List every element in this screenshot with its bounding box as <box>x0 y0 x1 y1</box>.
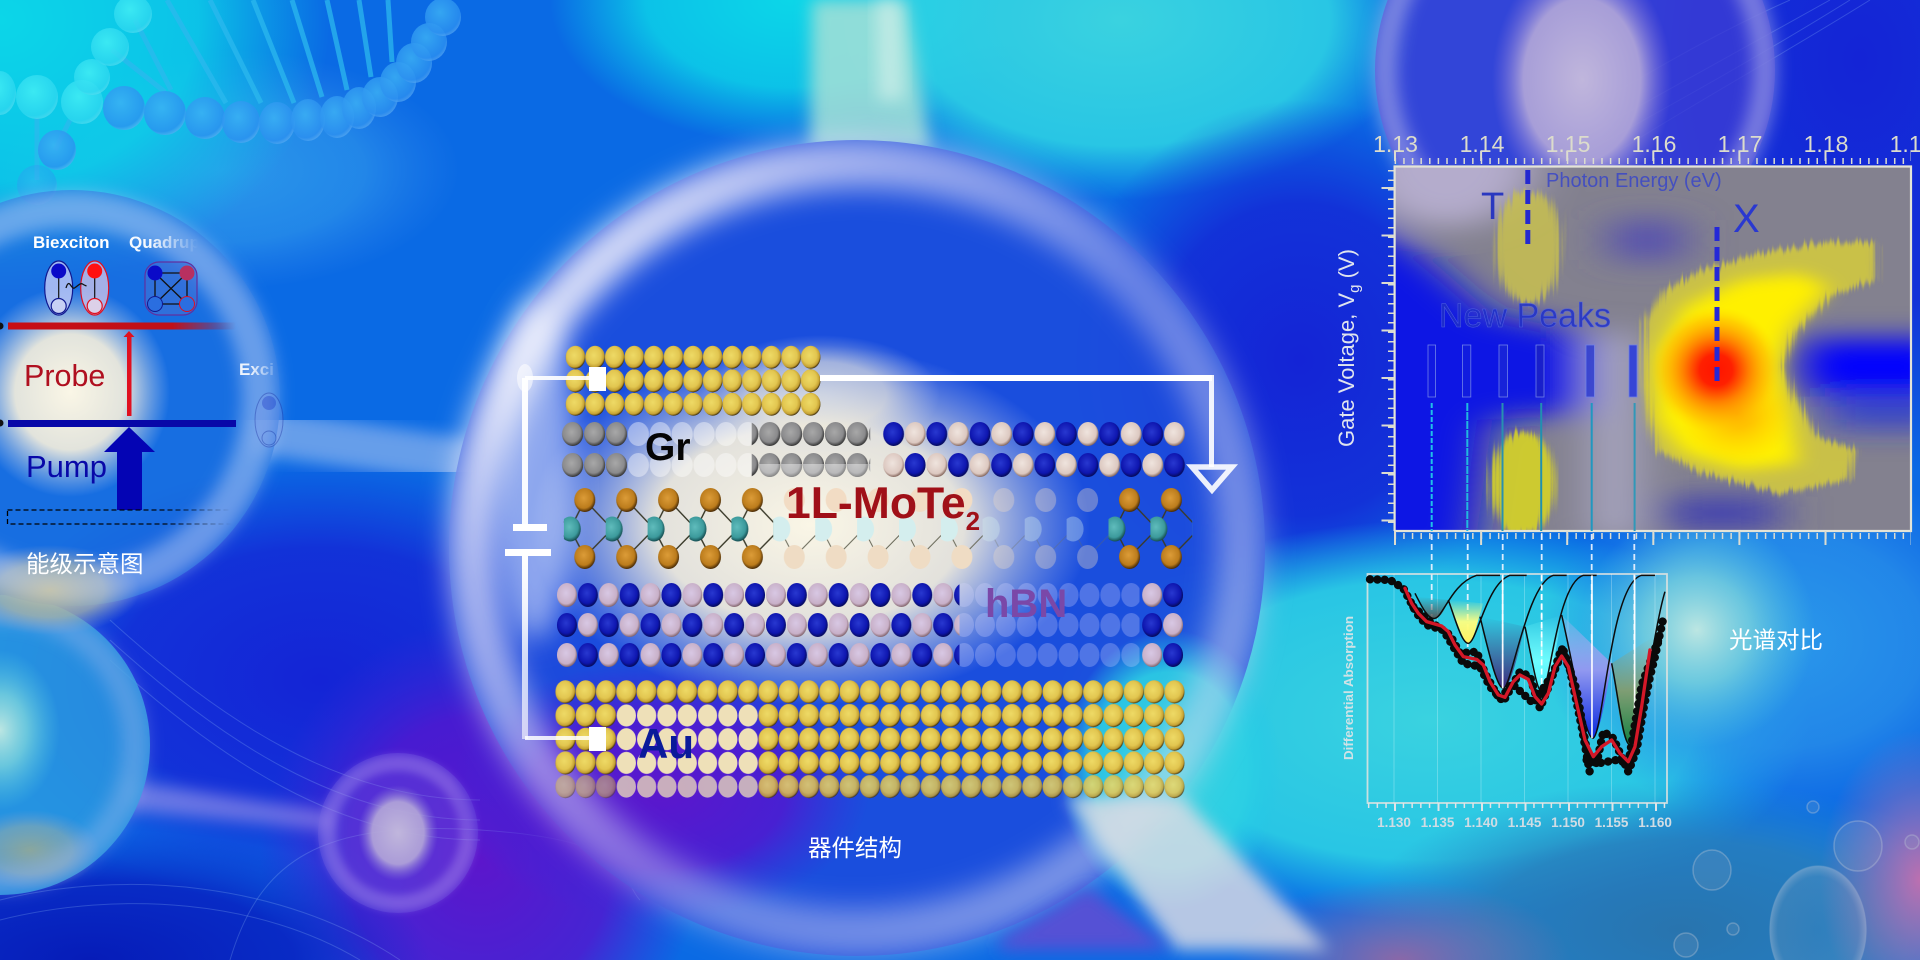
heat map <box>1338 136 1920 545</box>
label: hBN: hBN <box>985 582 1067 626</box>
layer: hBN bottom <box>556 582 1184 668</box>
rod: bottom right <box>1000 797 1329 950</box>
level end dots <box>0 322 4 426</box>
chart axis numbers: 1.145 <box>1508 815 1542 830</box>
absorption spectrum chart <box>1342 574 1672 830</box>
chart axis numbers: 1.150 <box>1551 815 1585 830</box>
sphere: right <box>1579 512 1815 748</box>
axis numbers: 1.15 <box>1546 131 1590 157</box>
arrow: probe <box>124 331 134 416</box>
layer: top gold electrode <box>566 346 820 416</box>
label: Probe: Probe <box>24 359 105 393</box>
axis title: gate voltage: (V) <box>1334 249 1359 285</box>
new peak markers <box>1428 345 1637 397</box>
device structure <box>505 346 1232 798</box>
sphere: top right <box>1375 0 1775 270</box>
marker: X line <box>1714 227 1720 385</box>
red energy level <box>8 322 236 330</box>
axes frame <box>1395 166 1911 531</box>
label: energy diagram caption: 能级示意图 <box>26 551 144 577</box>
axis title: gate voltage: Gate Voltage, V <box>1334 293 1359 447</box>
chart axis numbers: 1.130 <box>1377 815 1411 830</box>
peak curves <box>1415 575 1665 745</box>
peak X outer <box>1645 242 1875 493</box>
vertical grid <box>1394 574 1655 803</box>
peak X core <box>1656 312 1776 424</box>
axis numbers: 1.13 <box>1373 131 1418 157</box>
sphere: centre <box>449 140 1280 956</box>
axis numbers: 1.16 <box>1632 131 1676 157</box>
guide lines inside chart <box>1503 575 1635 742</box>
marker: T line <box>1525 170 1530 246</box>
chart ticks <box>1368 806 1667 807</box>
chart axis numbers <box>1377 815 1672 830</box>
peak T upper <box>1496 190 1561 303</box>
axis numbers: 1.14 <box>1460 131 1505 157</box>
peak guide lines in map <box>1432 403 1635 531</box>
icon: biexciton <box>45 261 109 315</box>
layer: MoTe2 <box>564 486 1192 572</box>
arrow: pump <box>104 427 155 510</box>
axis numbers: 1.17 <box>1718 131 1762 157</box>
peak fills <box>1417 597 1653 745</box>
label: Gr: Gr <box>645 426 691 469</box>
DNA strand <box>0 0 461 205</box>
ticks <box>1388 156 1911 538</box>
data points <box>1370 579 1663 773</box>
label: Pump: Pump <box>26 449 107 484</box>
sphere: lower left <box>0 595 150 895</box>
axis numbers: 1.18 <box>1804 131 1848 157</box>
layer: graphene <box>562 421 871 478</box>
caption: spectrum comparison: 光谱对比 <box>1729 627 1823 653</box>
connector dashed lines <box>1432 534 1634 740</box>
connecting rods <box>125 0 931 830</box>
peak X yellow <box>1657 273 1829 470</box>
label: Biexciton: Biexciton <box>33 233 110 252</box>
chart axis numbers: 1.135 <box>1421 815 1455 830</box>
label: Quadruplon (faded): Quadrup <box>129 233 200 252</box>
blue energy level <box>8 420 236 427</box>
chart axis title: Differential Absorption <box>1342 616 1356 760</box>
icon: exciton (faded) <box>255 393 283 447</box>
circuit wires <box>505 364 1232 751</box>
label: X: X <box>1733 197 1760 241</box>
label: T: T <box>1481 186 1504 228</box>
label: Exciton (faded): Exci <box>239 360 274 379</box>
label: Au: Au <box>638 720 694 767</box>
sphere: small bottom <box>318 753 478 913</box>
icon: quadruplon <box>145 262 197 315</box>
axis title: photon energy: Photon Energy (eV) <box>1546 170 1722 192</box>
layer: hBN top right <box>883 421 1185 478</box>
chart axis numbers: 1.155 <box>1595 815 1629 830</box>
label: 1L-MoTe2: 2 <box>966 506 980 536</box>
label: New Peaks: New Peaks <box>1439 297 1611 335</box>
caption: device structure: 器件结构 <box>808 835 902 861</box>
heat map image <box>1396 168 1910 530</box>
dashed ground state box <box>8 510 232 524</box>
peak T lower <box>1490 432 1555 535</box>
label: 1L-MoTe2: 1L-MoTe <box>786 479 966 528</box>
chart axis numbers: 1.160 <box>1638 815 1672 830</box>
axis title: gate voltage: g <box>1346 285 1363 293</box>
chart frame <box>1368 574 1667 803</box>
energy level diagram <box>0 233 283 524</box>
axis numbers <box>1373 131 1920 157</box>
fitted peaks and data <box>1370 575 1665 773</box>
layer: gold bottom electrode <box>555 680 1185 798</box>
sphere: left <box>0 190 280 635</box>
fit curve <box>1405 588 1650 762</box>
peak X orange <box>1694 391 1781 454</box>
chart axis numbers: 1.140 <box>1464 815 1498 830</box>
